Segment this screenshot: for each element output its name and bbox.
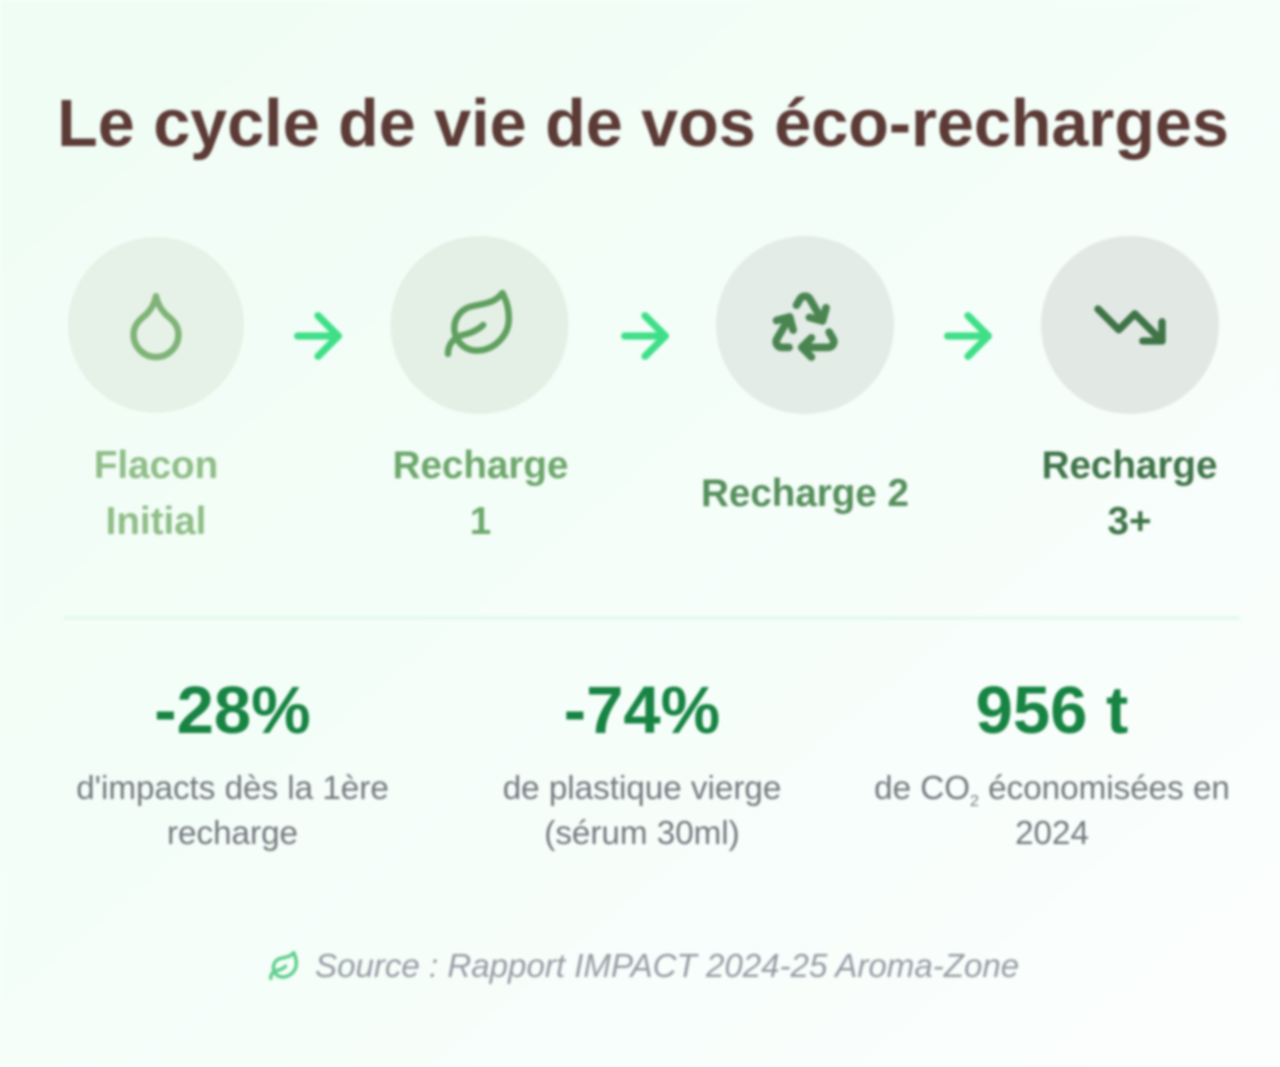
label: Flacon Initial: Initial <box>106 500 206 543</box>
description: 2 <box>970 793 979 810</box>
number: 956 t <box>976 673 1128 748</box>
description: 2024 <box>1015 815 1089 852</box>
label: Recharge 2: Recharge 2 <box>701 472 909 515</box>
number: -74% <box>564 673 720 748</box>
icon: leaf in circle <box>390 236 568 414</box>
stat: -28% <box>76 673 389 852</box>
arrow 1 <box>298 316 338 356</box>
step: Recharge 3+ <box>1041 236 1219 543</box>
arrow 2 <box>625 316 665 356</box>
description: (sérum 30ml) <box>544 815 740 852</box>
label: Recharge 1: 1 <box>470 500 491 543</box>
stat: 956 t <box>874 673 1230 852</box>
step: Flacon Initial <box>68 237 244 543</box>
arrow 3 <box>948 316 988 356</box>
label: Flacon Initial: Flacon <box>94 444 218 487</box>
source note <box>271 948 1019 985</box>
step: Recharge 2 <box>701 236 909 515</box>
icon: droplet in circle <box>68 237 244 413</box>
title: Le cycle de vie de vos éco-recharges <box>57 87 1229 161</box>
icon: recycle in circle <box>716 236 894 414</box>
description: d'impacts dès la 1ère <box>76 770 389 807</box>
source text: Source : Rapport IMPACT 2024-25 Aroma-Zone <box>315 948 1019 985</box>
description: recharge <box>167 815 298 852</box>
icon: trending down in circle <box>1041 236 1219 414</box>
label: Recharge 3+: Recharge <box>1042 444 1217 487</box>
description: de CO <box>874 770 1230 810</box>
label: Recharge 3+: 3+ <box>1108 500 1151 543</box>
description: économisées en <box>979 770 1230 807</box>
description: de plastique vierge <box>503 770 781 807</box>
step: Recharge 1 <box>390 236 568 543</box>
icon: small leaf <box>271 953 296 978</box>
label: Recharge 1: Recharge <box>393 444 568 487</box>
stat: -74% <box>503 673 781 852</box>
number: -28% <box>154 673 311 748</box>
